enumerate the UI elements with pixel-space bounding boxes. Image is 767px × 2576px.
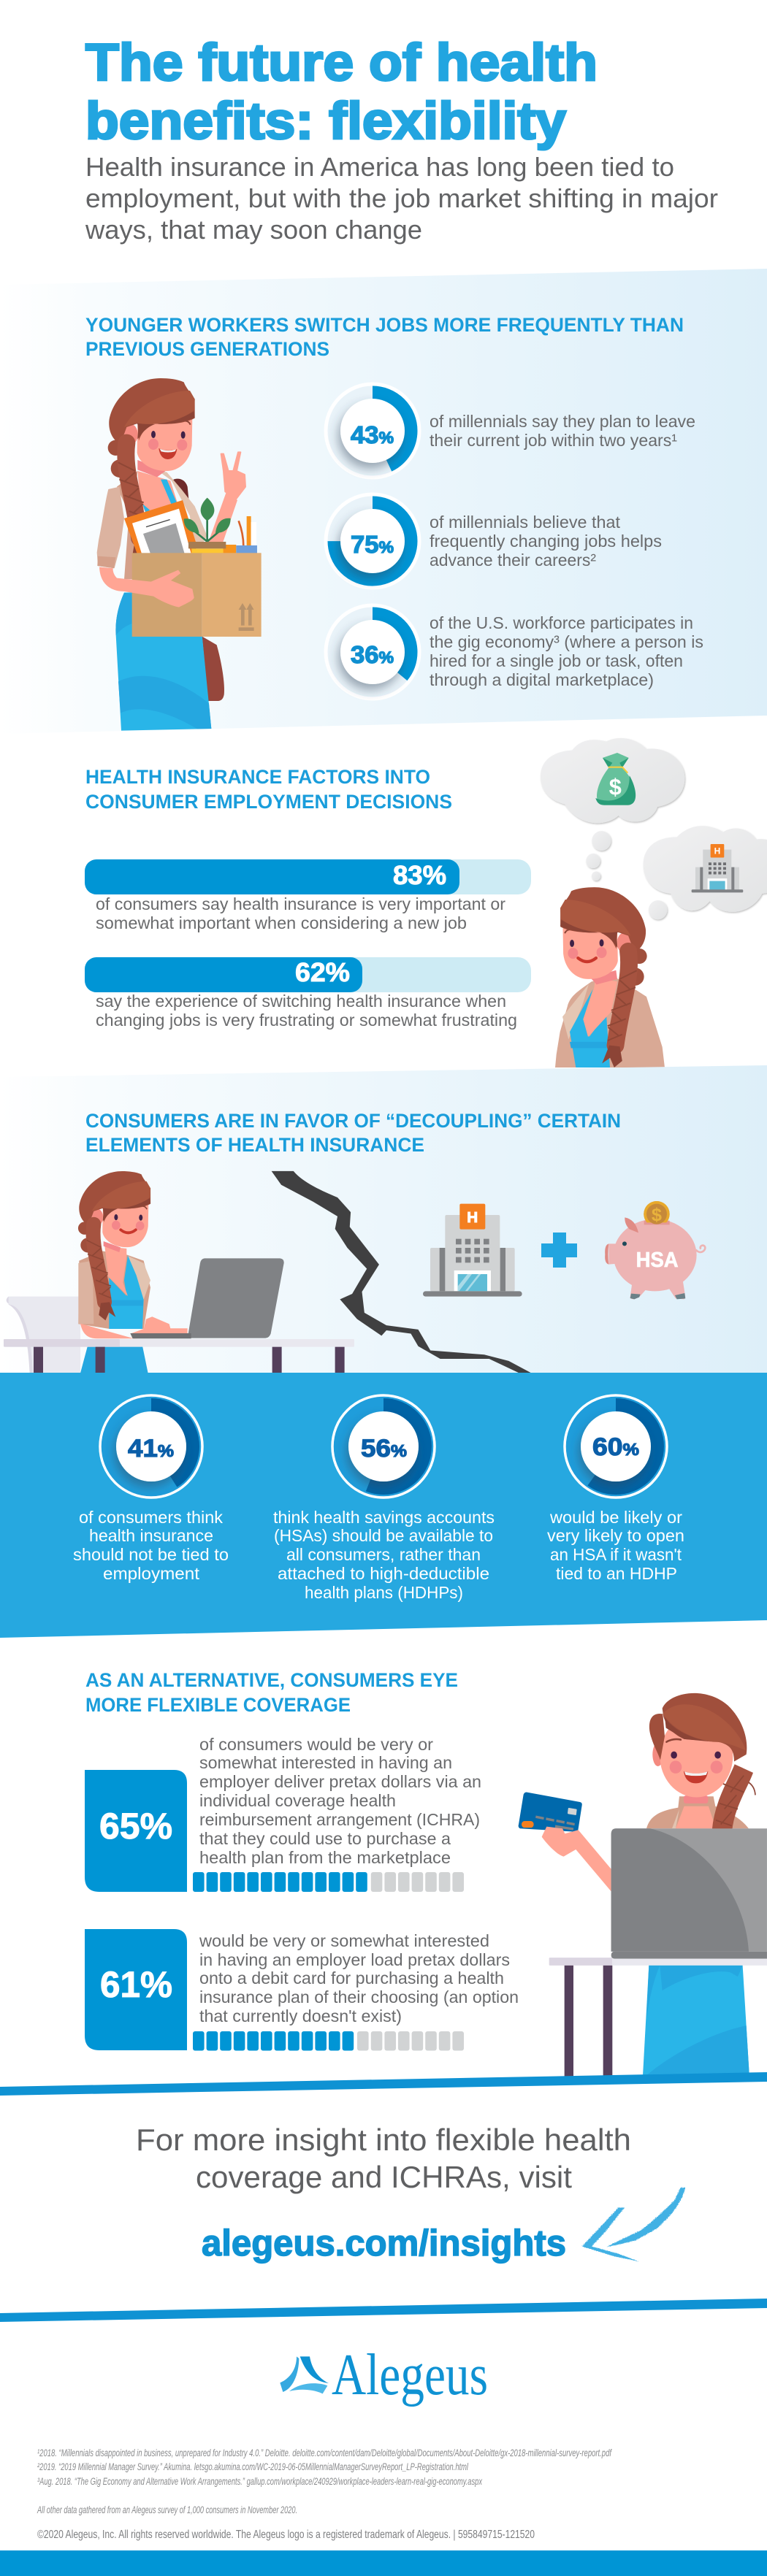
stat: 41%: health insurance: [89, 1526, 213, 1545]
body: [555, 978, 665, 1067]
stat block: 65%: individual coverage health: [199, 1791, 396, 1810]
divider band: [0, 2072, 767, 2096]
stat: 43%: [326, 384, 695, 478]
desk items: [247, 516, 251, 547]
stat: 56%: think health savings accounts: [273, 1508, 495, 1527]
thought cloud: hospital: [644, 826, 767, 912]
logo: Alegeus: [280, 2343, 488, 2407]
bar: 83%: 83%: [393, 860, 446, 890]
laptop: [188, 1258, 284, 1338]
stat block: 61%: in having an employer load pretax dollars: [199, 1950, 510, 1969]
stat: 41%: employment: [103, 1564, 200, 1583]
jacket: [646, 1796, 749, 1828]
illustration: woman with box: [97, 378, 262, 731]
stat: 41%: 41%: [128, 1435, 174, 1463]
stat: 60%: tied to an HDHP: [556, 1564, 677, 1583]
stat block: 65%: employer deliver pretax dollars via an: [199, 1772, 481, 1791]
title: [85, 34, 598, 150]
subtitle: ways, that may soon change: [85, 215, 422, 245]
laptop: [611, 1828, 767, 1952]
stat: 43%: of millennials say they plan to leave: [430, 412, 695, 431]
braid: [722, 1768, 744, 1831]
desk: [549, 1958, 612, 1966]
footnotes: All other data gathered from an Alegeus survey of 1,000 consumers in November 2020.: [37, 2504, 297, 2515]
link: alegeus.com/insights: [202, 2223, 566, 2263]
skirt: [80, 1346, 148, 1373]
footer bar: [0, 2550, 767, 2576]
thought bubbles: [586, 831, 667, 919]
bar: 62%: [85, 957, 531, 1030]
call to action: coverage and ICHRAs, visit: [196, 2160, 572, 2194]
icon: hand-drawn arrow: [582, 2188, 685, 2261]
icon: hospital: H: [467, 1209, 478, 1226]
heading: employment decisions: [85, 766, 452, 813]
stat: 41%: [73, 1395, 229, 1583]
skirt: [643, 1966, 749, 2076]
heading: flexible coverage: MORE FLEXIBLE COVERAGE: [85, 1694, 351, 1716]
stat: 56%: 56%: [361, 1435, 407, 1463]
bar: 62%: changing jobs is very frustrating or somewhat frustrating: [96, 1011, 517, 1030]
heading: younger workers: PREVIOUS GENERATIONS: [85, 338, 329, 360]
desk: [4, 1339, 354, 1347]
stat: 36%: hired for a single job or task, often: [430, 651, 683, 670]
stat: 75%: [326, 494, 662, 588]
heading: decoupling: CONSUMERS ARE IN FAVOR OF “DECOUPLING” CERTAIN: [85, 1110, 621, 1132]
stat: 75%: of millennials believe that: [430, 513, 621, 532]
icon: piggy bank HSA: HSA: [636, 1249, 679, 1272]
stat: 56%: [273, 1395, 495, 1602]
call to action: [136, 2123, 685, 2263]
stat: 36%: the gig economy³ (where a person is: [430, 632, 703, 651]
icon: piggy bank HSA: $: [652, 1205, 662, 1225]
illustration: woman at laptop: [4, 1171, 354, 1373]
thought cloud: money: $: [609, 774, 622, 800]
footnotes: ²2019. “2019 Millennial Manager Survey.” Akumina. letsgo.akumina.com/WC-2019-06-05MillennialManagerSurveyReport_LP-Registration.html: [37, 2461, 469, 2472]
progress: 12 of 20: [193, 2031, 464, 2050]
bar: 83%: somewhat important when considering a new job: [96, 913, 467, 932]
heading: flexible coverage: [85, 1669, 458, 1716]
title: The future of health: [85, 34, 598, 92]
divider band: [0, 2299, 767, 2322]
stat: 75%: advance their careers²: [430, 551, 596, 570]
stat: 60%: 60%: [592, 1433, 639, 1461]
head: [652, 1743, 663, 1766]
chair: [7, 1297, 80, 1373]
stat block: 61%: insurance plan of their choosing (an option: [199, 1987, 519, 2006]
stat: 36%: [326, 605, 703, 699]
stat block: 65%: somewhat interested in having an: [199, 1753, 452, 1772]
call to action: For more insight into flexible health: [136, 2123, 631, 2157]
panel: decoupling: [0, 1065, 767, 1373]
stat block: 65%: that they could use to purchase a: [199, 1829, 451, 1848]
stat block: 65%: [85, 1735, 481, 1892]
bar: 83%: [85, 859, 531, 932]
subtitle: employment, but with the job market shifting in major: [85, 183, 718, 213]
stat: 60%: would be likely or: [549, 1508, 682, 1527]
stat: 36%: of the U.S. workforce participates in: [430, 613, 693, 632]
stat block: 61%: onto a debit card for purchasing a health: [199, 1969, 504, 1987]
title: benefits: flexibility: [85, 93, 567, 150]
panel: employment decisions: [85, 738, 767, 1067]
illustration: thinking woman with clouds: [541, 738, 767, 1067]
arm: [80, 1316, 188, 1338]
bar: 62%: 62%: [295, 957, 350, 987]
panel: flexible coverage: [85, 1669, 767, 2077]
stat: 56%: health plans (HDHPs): [305, 1583, 463, 1602]
logo mark: [280, 2356, 329, 2393]
logo: Alegeus: Alegeus: [332, 2343, 488, 2407]
heading: younger workers: YOUNGER WORKERS SWITCH JOBS MORE FREQUENTLY THAN: [85, 314, 684, 336]
stat: 43%: their current job within two years¹: [430, 431, 677, 450]
icon: piggy bank HSA: $: [652, 1205, 662, 1225]
heading: employment decisions: CONSUMER EMPLOYMENT DECISIONS: [85, 791, 452, 813]
heading: employment decisions: HEALTH INSURANCE FACTORS INTO: [85, 766, 430, 788]
icon: hospital: [423, 1204, 522, 1297]
thought cloud: hospital: H: [714, 846, 720, 856]
stat block: 65%: 65%: [99, 1806, 172, 1847]
stat block: 61%: [85, 1929, 519, 2050]
icon: plus: [541, 1233, 577, 1268]
bar: 62%: say the experience of switching health insurance when: [96, 992, 506, 1011]
stat: 41%: of consumers think: [79, 1508, 224, 1527]
stat: 60%: [547, 1395, 684, 1583]
illustration: woman with debit card: [519, 1693, 767, 2077]
stat: 36%: through a digital marketplace): [430, 670, 654, 689]
heading: younger workers: [85, 314, 684, 360]
stat block: 65%: reimbursement arrangement (ICHRA): [199, 1810, 480, 1829]
icon: piggy bank HSA: [605, 1201, 705, 1299]
frame: [124, 500, 196, 555]
torso: [78, 1251, 150, 1329]
stat: 56%: all consumers, rather than: [286, 1545, 481, 1564]
stat: 56%: (HSAs) should be available to: [274, 1526, 493, 1545]
head: woman 3: [78, 1171, 150, 1320]
holding arm: [99, 567, 194, 607]
panel: blue stats: [0, 1373, 767, 1638]
panel: younger workers: [0, 269, 767, 734]
copyright: ©2020 Alegeus, Inc. All rights reserved worldwide. The Alegeus logo is a registered trademark of Alegeus. | 595849715-121520: [37, 2529, 535, 2541]
stat: 75%: 75%: [351, 531, 394, 558]
thought cloud: money: [541, 738, 684, 823]
stat: 43%: 43%: [351, 421, 394, 448]
footnotes: ³Aug. 2018. “The Gig Economy and Alternative Work Arrangements.” gallup.com/workplace/240929/workplace-leaders-learn-real-gig-economy.aspx: [37, 2476, 483, 2487]
footnotes: [37, 2447, 612, 2515]
head: woman 2: [560, 887, 647, 1067]
plant: [192, 502, 221, 542]
stat block: 61%: that currently doesn't exist): [199, 2006, 402, 2025]
stat: 75%: frequently changing jobs helps: [430, 532, 662, 551]
crack: [272, 1171, 531, 1373]
stat block: 61%: 61%: [100, 1964, 172, 2005]
stat: 60%: an HSA if it wasn't: [550, 1545, 682, 1564]
stat: 56%: attached to high-deductible: [278, 1564, 489, 1583]
debit card: [519, 1793, 582, 1832]
stat: 36%: 36%: [351, 641, 394, 668]
stat block: 65%: health plan from the marketplace: [199, 1848, 451, 1867]
heading: decoupling: ELEMENTS OF HEALTH INSURANCE: [85, 1134, 424, 1156]
subtitle: Health insurance in America has long been tied to: [85, 152, 674, 182]
box: [132, 553, 202, 637]
stat: 60%: very likely to open: [547, 1526, 684, 1545]
stat: 41%: should not be tied to: [73, 1545, 229, 1564]
stat block: 61%: would be very or somewhat interested: [199, 1931, 489, 1950]
progress: 13 of 20: [193, 1872, 464, 1892]
heading: flexible coverage: AS AN ALTERNATIVE, CONSUMERS EYE: [85, 1669, 458, 1691]
stat block: 65%: of consumers would be very or: [199, 1735, 433, 1754]
bar: 83%: of consumers say health insurance is very important or: [96, 894, 505, 913]
subtitle: [85, 152, 718, 245]
heading: decoupling: [85, 1110, 621, 1156]
